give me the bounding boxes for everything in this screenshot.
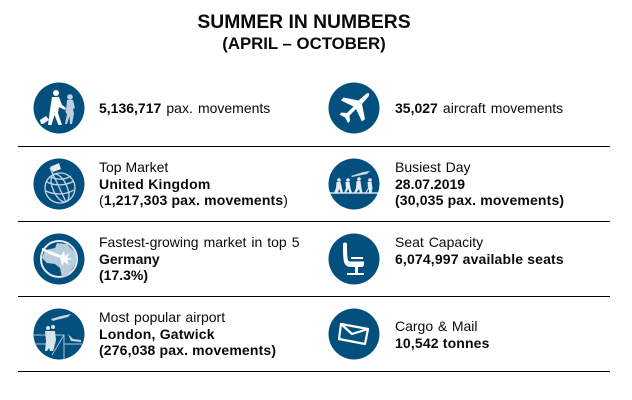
stat: top market: (1,217,303 pax. movements) [99, 192, 288, 208]
stat: most popular airport: London, Gatwick [99, 326, 215, 342]
stat: fastest-growing market: Germany [99, 251, 160, 267]
icon: airport viewing terrace [34, 308, 84, 360]
subtitle: (APRIL – OCTOBER) [222, 34, 386, 53]
icon: seat [328, 234, 380, 284]
stat: fastest-growing market: Fastest-growing market in top 5 [99, 234, 299, 250]
stat: busiest day [395, 159, 564, 208]
stat: seat capacity: Seat Capacity [395, 234, 483, 250]
stat: seat capacity: 6,074,997 available seats [395, 251, 564, 267]
stat: passenger movements: 5,136,717 pax. movements [99, 100, 270, 116]
icon: passengers walking [34, 82, 84, 134]
icon: globe with aircraft [34, 234, 84, 284]
stat: most popular airport [99, 309, 276, 358]
icon: busiest day people and plane [328, 158, 380, 210]
title: SUMMER IN NUMBERS [197, 12, 411, 33]
stat: top market: United Kingdom [99, 176, 211, 192]
stat: cargo and mail [395, 318, 490, 351]
stat: busiest day: 28.07.2019 [395, 176, 465, 192]
icon: aircraft [328, 82, 380, 134]
stat: busiest day: (30,035 pax. movements) [395, 192, 564, 208]
stat: cargo and mail: Cargo & Mail [395, 318, 478, 334]
stat: busiest day: Busiest Day [395, 159, 470, 175]
icon: globe with flag [34, 158, 84, 210]
stat: seat capacity [395, 234, 564, 267]
stat: cargo and mail: 10,542 tonnes [395, 335, 490, 351]
stat: fastest-growing market: (17.3%) [99, 267, 148, 283]
stat: most popular airport: Most popular airport [99, 309, 225, 325]
stat: fastest-growing market [99, 234, 299, 283]
stat: top market [99, 159, 288, 208]
stat: aircraft movements: 35,027 aircraft movements [395, 100, 563, 116]
stat: top market: Top Market [99, 159, 168, 175]
icon: envelope [328, 308, 380, 360]
stat: most popular airport: (276,038 pax. movements) [99, 342, 276, 358]
